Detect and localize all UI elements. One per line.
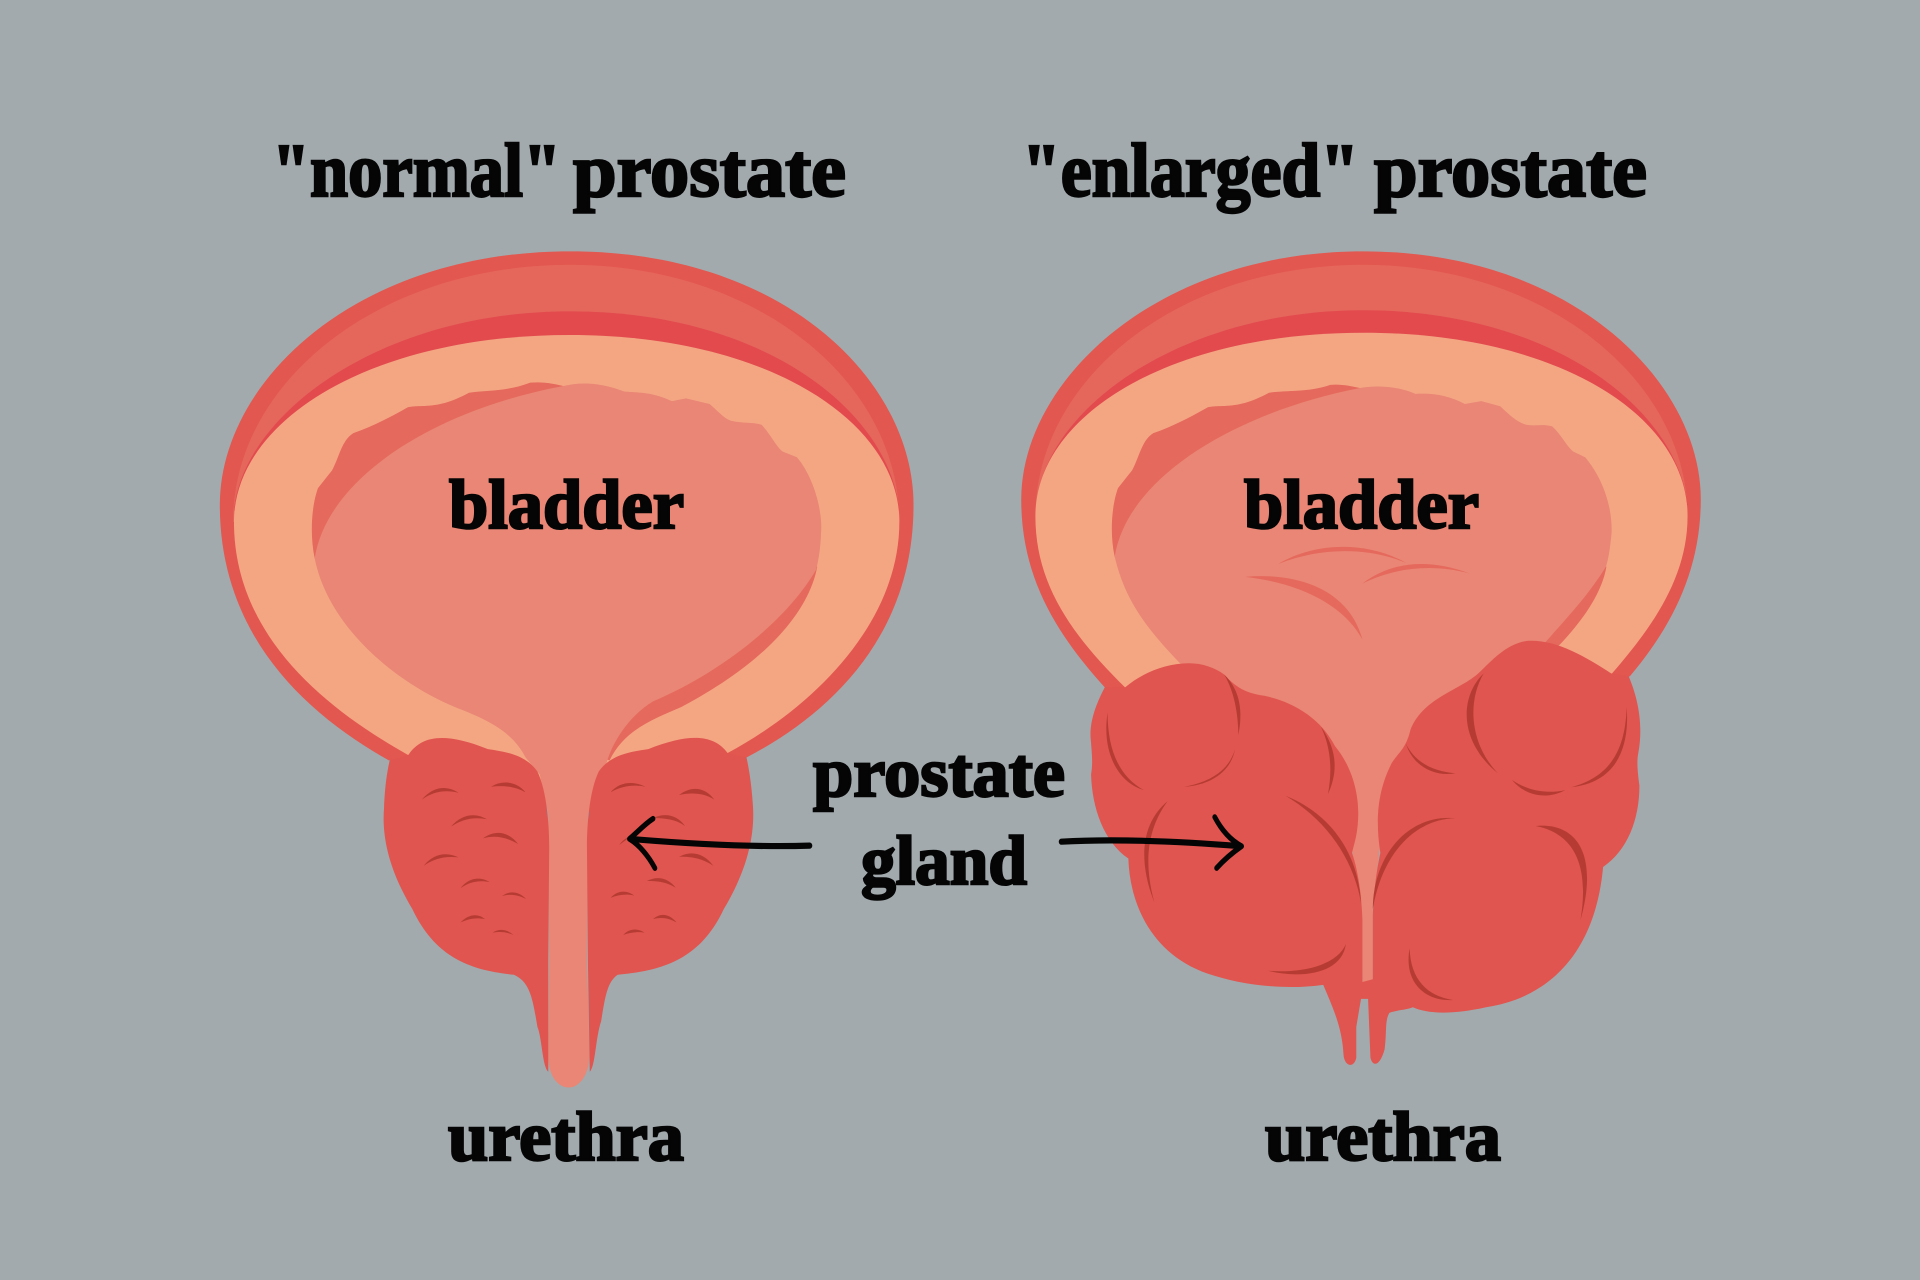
bladder muscle layer [1035, 333, 1688, 791]
bladder outer wall [1021, 251, 1701, 791]
label: bladder left: bladder [449, 467, 684, 544]
prostate creases [1106, 673, 1627, 1000]
label: urethra right: urethra [1265, 1099, 1501, 1176]
bladder wall upper band [233, 265, 899, 522]
bladder wall dark band [1036, 310, 1688, 505]
title: normal prostate [272, 129, 846, 213]
bladder inner shadow [1112, 385, 1606, 735]
prostate right lobe [587, 738, 753, 1072]
title: normal prostate: prostate [573, 129, 846, 213]
bladder cavity and urethra [1115, 386, 1612, 982]
bladder creases [1245, 547, 1470, 640]
label: bladder right: bladder [1244, 467, 1479, 544]
diagram: normal prostate [220, 251, 914, 1088]
diagram: enlarged prostate [1021, 251, 1701, 1065]
label: urethra left: urethra [448, 1099, 684, 1176]
title: enlarged prostate: "enlarged" [1022, 129, 1359, 213]
prostate texture creases [422, 783, 714, 935]
arrow to normal prostate [629, 819, 810, 868]
title: normal prostate: "normal" [272, 129, 561, 213]
enlarged prostate lobes [1090, 641, 1640, 1065]
label: prostate: prostate [813, 735, 1065, 812]
prostate left lobe [384, 738, 549, 1072]
bladder inner shadow [312, 382, 817, 760]
arrow to enlarged prostate [1061, 817, 1242, 868]
title: enlarged prostate: prostate [1374, 129, 1647, 213]
bladder cavity and urethra [315, 383, 821, 1088]
bladder outer wall [220, 251, 914, 760]
bladder muscle layer [234, 335, 899, 791]
title: enlarged prostate [1022, 129, 1647, 213]
bladder wall dark band [234, 311, 899, 511]
label: gland: gland [861, 823, 1027, 900]
bladder wall upper band [1035, 265, 1688, 516]
